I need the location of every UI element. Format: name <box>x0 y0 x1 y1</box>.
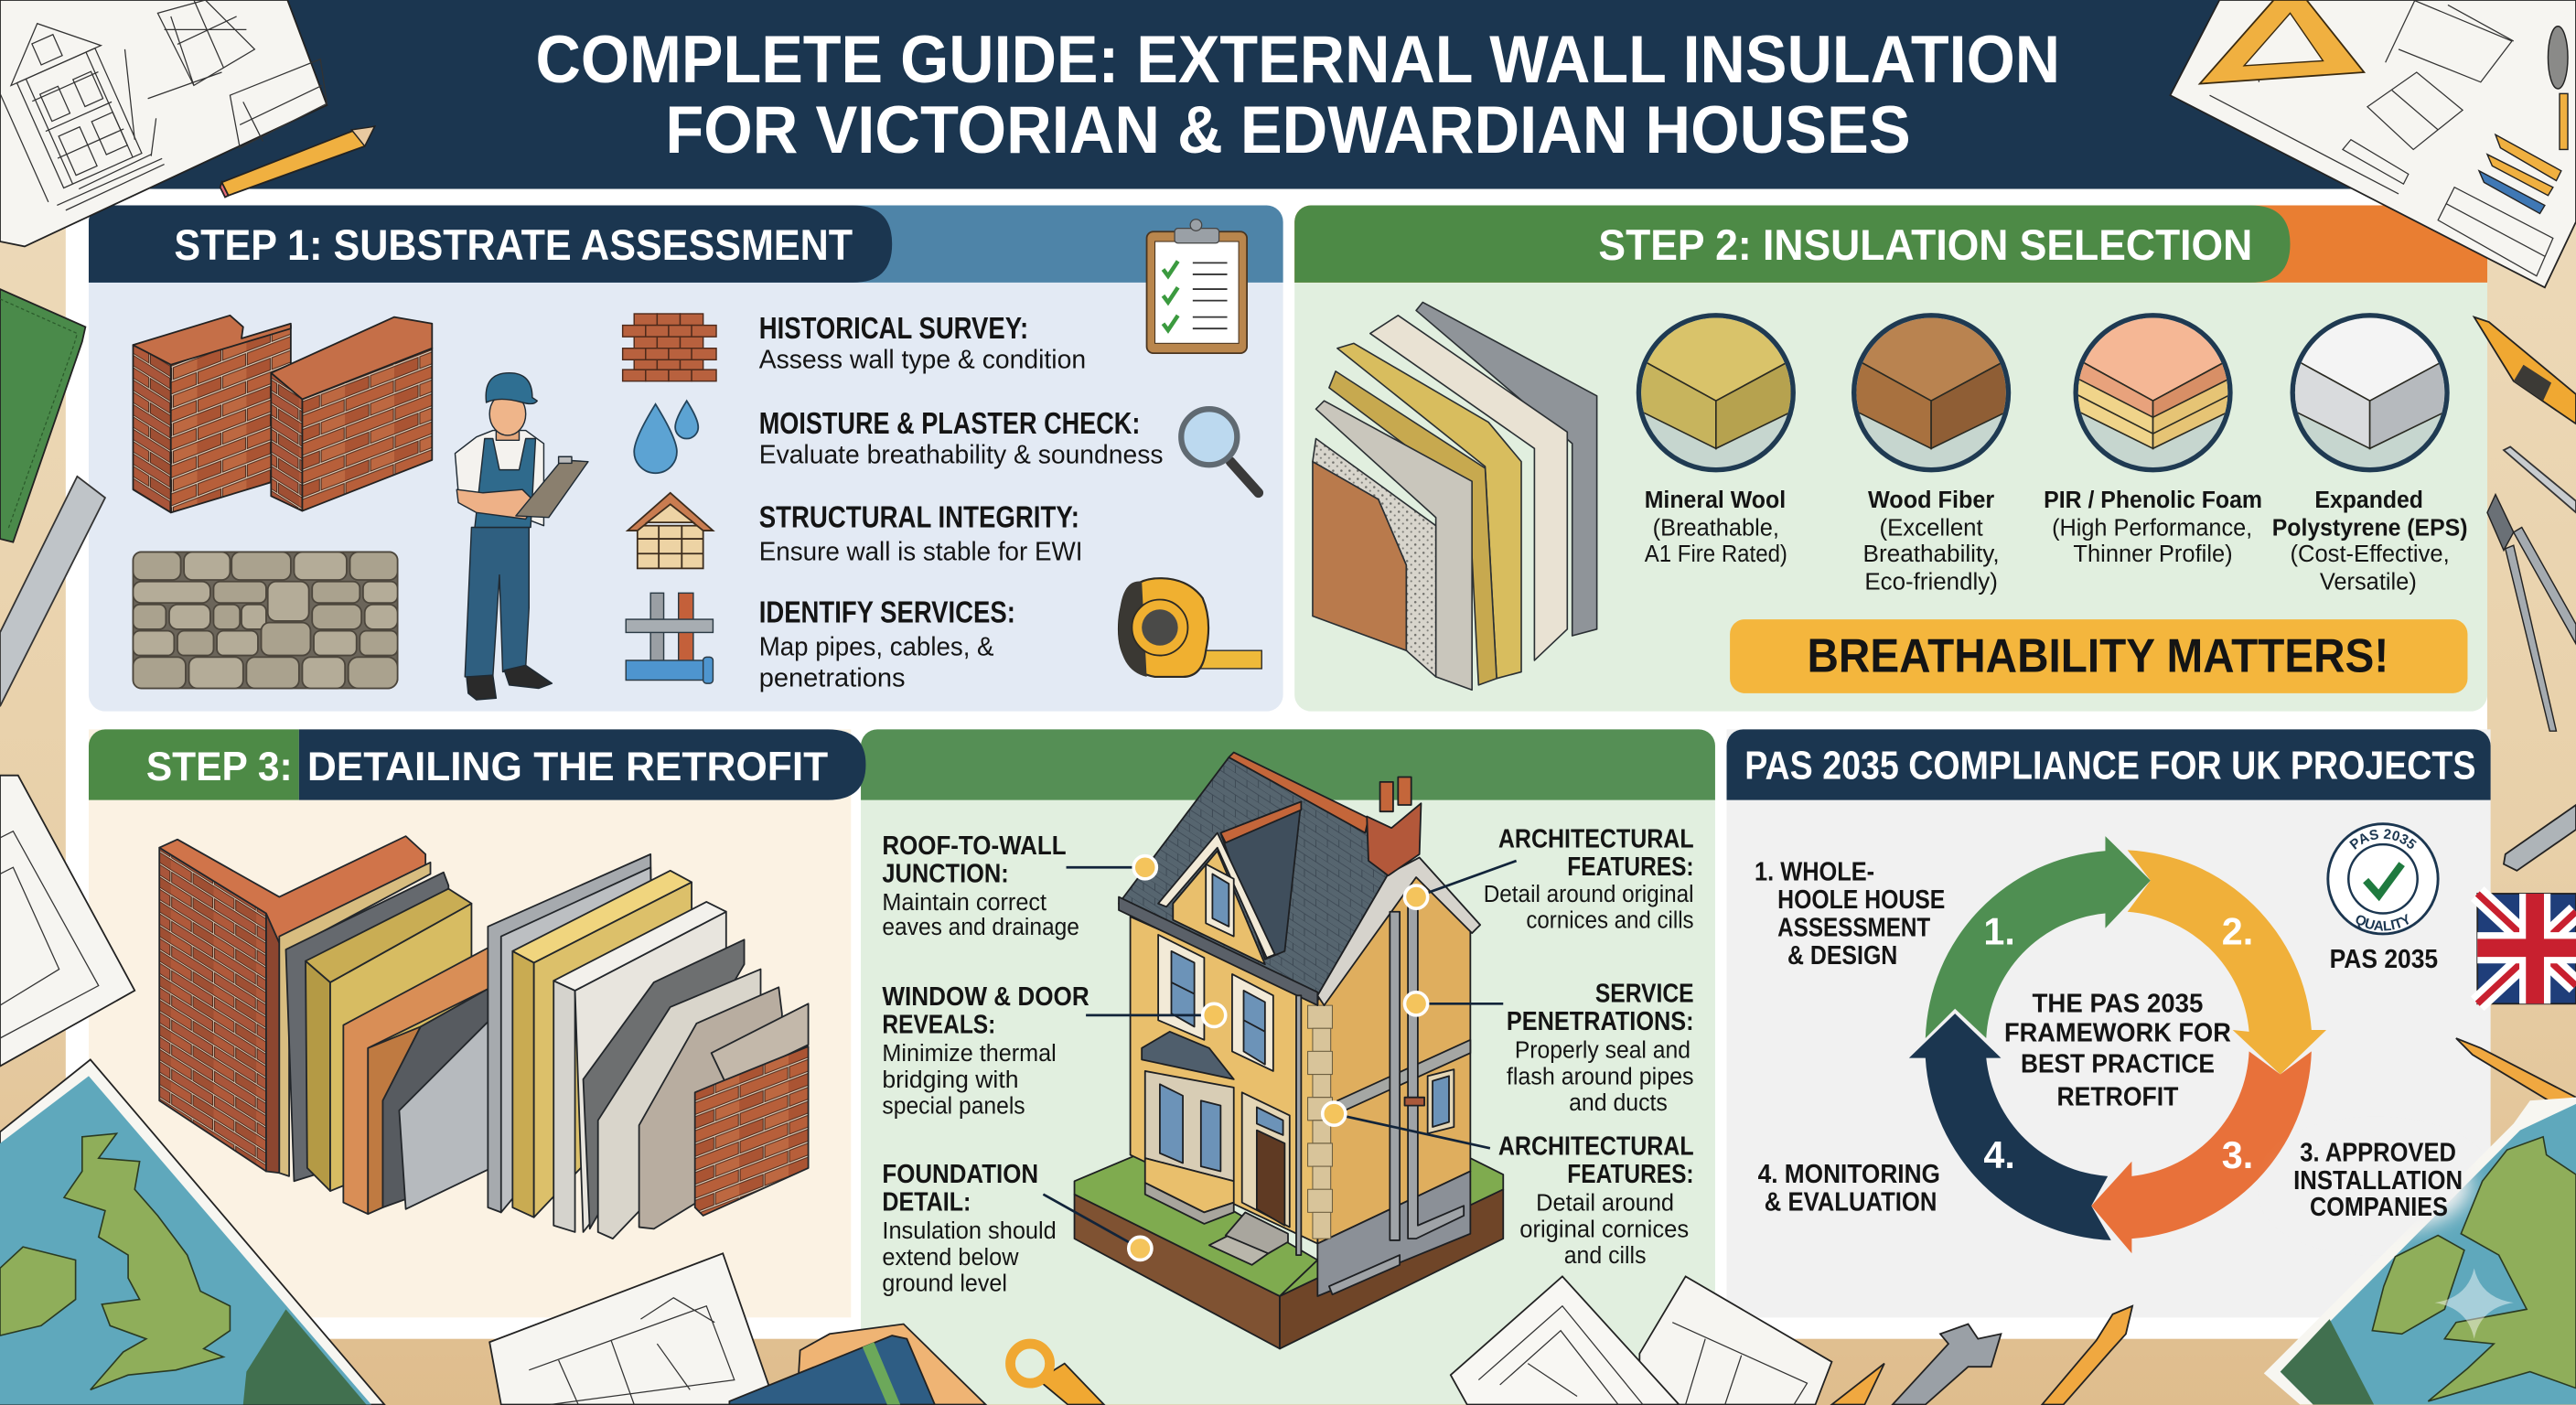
callout: architectural features lower <box>1323 1102 1694 1269</box>
callout: roof-to-wall junction: ROOF-TO-WALL <box>882 831 1067 861</box>
callout: foundation detail: FOUNDATION <box>882 1160 1038 1189</box>
cycle arrow 4: 4. <box>1983 1134 2015 1176</box>
pencils <box>2479 27 2568 213</box>
blueprint sketch: house elevation <box>0 0 162 208</box>
cycle centre text: FRAMEWORK FOR <box>2004 1019 2231 1048</box>
illustration: surveyor with clipboard <box>455 373 588 700</box>
stage label 3 <box>2293 1139 2463 1222</box>
material: expanded polystyrene: Versatile) <box>2320 568 2417 595</box>
title: FOR VICTORIAN & EDWARDIAN HOUSES <box>665 91 1911 167</box>
header band <box>0 0 2576 189</box>
house roof <box>1119 753 1480 1005</box>
material: wood fiber <box>1841 312 2023 595</box>
step 1 heading pill: STEP 1: SUBSTRATE ASSESSMENT <box>174 221 853 270</box>
callout: service penetrations: SERVICE <box>1595 980 1694 1009</box>
material: mineral wool: Mineral Wool <box>1645 486 1786 513</box>
stage label 4 <box>1758 1160 1940 1217</box>
panel: step 2 insulation selection <box>1294 205 2487 712</box>
PIR foam sample cube <box>2078 318 2228 450</box>
icon: pencil top left <box>220 126 374 198</box>
callout: service penetrations <box>1405 980 1694 1116</box>
step 1 header band <box>89 205 1283 283</box>
structural integrity row: Ensure wall is stable for EWI <box>759 537 1083 566</box>
cycle arrow 3 <box>2091 1051 2312 1253</box>
right map GB landmass <box>2428 1137 2576 1401</box>
icon: clipboard checklist <box>1147 220 1247 353</box>
house front windows and door <box>1142 935 1301 1255</box>
pen right <box>2504 805 2576 871</box>
wood fiber sample cube <box>1856 318 2006 450</box>
callout: architectural features lower: ARCHITECTURAL <box>1498 1132 1694 1162</box>
callout: architectural features upper: Detail around original <box>1484 880 1694 907</box>
title: COMPLETE GUIDE: EXTERNAL WALL INSULATION <box>535 21 2060 97</box>
blueprint: lower left <box>0 776 134 1067</box>
EPS sample cube <box>2294 318 2444 450</box>
step 2 heading pill <box>1294 205 2291 283</box>
material: mineral wool: A1 Fire Rated) <box>1645 540 1787 567</box>
material: expanded polystyrene: Expanded <box>2314 486 2423 513</box>
stage label 3: INSTALLATION <box>2293 1166 2463 1196</box>
quality badge: PAS 2035 <box>2349 829 2417 850</box>
material: PIR phenolic foam: (High Performance, <box>2052 513 2252 541</box>
stage label 4: & EVALUATION <box>1765 1188 1937 1217</box>
callout: breathability matters: BREATHABILITY MATTERS! <box>1808 630 2388 683</box>
callout: roof-to-wall junction: Maintain correct <box>882 888 1047 916</box>
material: mineral wool: (Breathable, <box>1653 513 1779 541</box>
illustration: stone wall <box>133 552 398 688</box>
stage label 1: & DESIGN <box>1787 941 1897 971</box>
panel: step 1 substrate assessment <box>89 205 1283 712</box>
material: PIR phenolic foam: PIR / Phenolic Foam <box>2044 486 2262 513</box>
callout: breathability matters <box>1730 619 2467 693</box>
moisture and plaster check row <box>634 401 1164 473</box>
step 2 heading pill: STEP 2: INSULATION SELECTION <box>1598 221 2252 270</box>
step 3 heading <box>89 729 865 800</box>
callout: roof-to-wall junction: JUNCTION: <box>882 859 1009 888</box>
illustration: layered insulation build-up <box>1313 302 1597 690</box>
cycle arrow 1 <box>1926 836 2151 1038</box>
icon: brick stack <box>623 314 716 381</box>
material: wood fiber: Eco-friendly) <box>1864 568 1998 595</box>
moisture and plaster check row: MOISTURE & PLASTER CHECK: <box>759 407 1140 441</box>
chart: PAS 2035 cycle <box>1909 836 2326 1253</box>
PAS 2035 heading: PAS 2035 COMPLIANCE FOR UK PROJECTS <box>1744 744 2475 788</box>
historical survey row <box>623 312 1086 381</box>
icon: wrench ring bottom <box>1010 1344 1104 1405</box>
small ruler right <box>2504 446 2576 512</box>
panel: PAS 2035 compliance <box>1727 729 2491 1317</box>
callout: window and door reveals: Minimize thermal <box>882 1039 1057 1067</box>
callout: foundation detail: DETAIL: <box>882 1188 971 1217</box>
material: mineral wool <box>1626 312 1808 567</box>
icon: union flag <box>2477 894 2576 1003</box>
steel ruler left <box>0 477 105 706</box>
step 1 heading pill <box>89 205 892 283</box>
green notebook left <box>0 289 85 542</box>
material: expanded polystyrene <box>2272 312 2467 595</box>
map: UK lower right <box>2264 1098 2576 1405</box>
pencil right <box>2456 1038 2576 1117</box>
Ireland landmass <box>0 1247 76 1335</box>
callout: window and door reveals <box>882 982 1226 1120</box>
material: wood fiber: (Excellent <box>1880 513 1983 541</box>
callout: window and door reveals: REVEALS: <box>882 1011 995 1040</box>
UK landmass <box>64 1133 230 1389</box>
step 3 heading: DETAILING THE RETROFIT <box>307 743 828 789</box>
watermark star <box>2435 1268 2514 1339</box>
white page sheet <box>66 189 2487 1339</box>
stage label 4: 4. MONITORING <box>1758 1160 1940 1189</box>
moisture and plaster check row: Evaluate breathability & soundness <box>759 440 1164 469</box>
callout: architectural features lower: original cornices <box>1519 1215 1689 1242</box>
PAS 2035 heading <box>1727 729 2491 800</box>
green header band <box>861 729 1715 800</box>
material: expanded polystyrene: Polystyrene (EPS) <box>2272 513 2467 541</box>
icon: water drops <box>634 401 698 473</box>
historical survey row: Assess wall type & condition <box>759 345 1086 374</box>
callout: architectural features upper: ARCHITECTURAL <box>1498 825 1694 854</box>
material: PIR phenolic foam <box>2044 312 2262 567</box>
blueprint: top right with set square, pencils and brush <box>2170 0 2576 287</box>
mineral wool sample cube <box>1641 318 1791 450</box>
callout: foundation detail: ground level <box>882 1270 1007 1297</box>
cycle arrow 2: 2. <box>2222 911 2253 953</box>
identify services row <box>626 593 1015 693</box>
quoin stones <box>1308 1005 1332 1239</box>
tools: bottom pencil, wrench and brush <box>1831 1306 2132 1405</box>
illustration: exploded wall layers <box>159 836 809 1239</box>
blueprint sketch: window and title block <box>66 0 327 210</box>
callout: architectural features upper <box>1405 825 1694 934</box>
identify services row: penetrations <box>759 664 906 693</box>
blueprint: top left <box>0 0 327 246</box>
callout: foundation detail: Insulation should <box>882 1217 1057 1244</box>
material: wood fiber: Breathability, <box>1863 540 2000 567</box>
illustration: victorian terraced house <box>1075 753 1503 1348</box>
house downpipes <box>1329 904 1464 1294</box>
title <box>535 21 2060 167</box>
icon: timber frame house <box>628 493 713 568</box>
identify services row: Map pipes, cables, & <box>759 633 994 662</box>
material: wood fiber: Wood Fiber <box>1868 486 1994 513</box>
callout: window and door reveals: special panels <box>882 1092 1025 1120</box>
blueprints: bottom right <box>1451 1276 1831 1405</box>
stage label 1: HOOLE HOUSE <box>1777 885 1945 915</box>
icon: tape measure <box>1119 578 1261 677</box>
identify services row: IDENTIFY SERVICES: <box>759 596 1015 630</box>
callout: window and door reveals: WINDOW & DOOR <box>882 982 1089 1012</box>
icon: magnifying glass <box>1181 409 1259 493</box>
callout: service penetrations: and ducts <box>1569 1089 1668 1116</box>
cycle arrow 4 <box>1909 1014 2111 1240</box>
structural integrity row <box>628 493 1083 568</box>
map: UK lower left <box>0 1059 384 1405</box>
cycle arrow 1: 1. <box>1983 911 2015 953</box>
stage label 3: 3. APPROVED <box>2300 1139 2456 1168</box>
callout: service penetrations: Properly seal and <box>1515 1036 1690 1064</box>
callout: architectural features upper: cornices and cills <box>1526 906 1694 934</box>
cycle arrow 2 <box>2128 850 2326 1075</box>
blueprint: bottom centre <box>489 1253 776 1405</box>
cycle arrow 3: 3. <box>2222 1134 2253 1176</box>
stage label 3: COMPANIES <box>2310 1193 2448 1222</box>
callout: service penetrations: flash around pipes <box>1507 1062 1694 1089</box>
stage label 1: 1. WHOLE- <box>1755 858 1874 887</box>
utility knife right <box>2474 317 2576 424</box>
cycle centre text: BEST PRACTICE <box>2021 1050 2215 1079</box>
icon: service pipes <box>626 593 713 683</box>
stage label 1: ASSESSMENT <box>1777 914 1931 943</box>
fade behind approved installation label <box>2281 1140 2471 1232</box>
callout: architectural features lower: and cills <box>1564 1241 1647 1269</box>
callout: roof-to-wall junction: eaves and drainage <box>882 913 1079 940</box>
quality badge: QUALITY <box>2356 913 2410 931</box>
quality badge <box>2326 822 2440 974</box>
callout: roof-to-wall junction <box>882 831 1156 940</box>
house chimney <box>1367 777 1421 875</box>
panel: house details <box>861 729 1715 1405</box>
cycle centre text: THE PAS 2035 <box>2033 989 2203 1018</box>
panel: step 3 detailing the retrofit <box>89 729 851 1317</box>
compass right <box>2487 495 2576 731</box>
notebook and envelope bottom <box>729 1325 986 1405</box>
callout: foundation detail <box>882 1160 1152 1297</box>
structural integrity row: STRUCTURAL INTEGRITY: <box>759 500 1079 534</box>
cycle centre text: RETROFIT <box>2056 1083 2179 1112</box>
historical survey row: HISTORICAL SURVEY: <box>759 312 1028 346</box>
quality badge: PAS 2035 <box>2330 945 2438 974</box>
callout: window and door reveals: bridging with <box>882 1066 1018 1093</box>
right map Ireland landmass <box>2372 1236 2464 1334</box>
cycle centre text <box>2004 989 2231 1112</box>
illustration: double brick wall <box>133 316 432 512</box>
callout: architectural features lower: FEATURES: <box>1567 1160 1694 1189</box>
house walls <box>1131 867 1470 1296</box>
step 2 header band <box>1294 205 2487 283</box>
callout: architectural features upper: FEATURES: <box>1567 853 1694 882</box>
callout: service penetrations: PENETRATIONS: <box>1507 1007 1694 1036</box>
step 3 heading: STEP 3: <box>146 743 293 789</box>
material: PIR phenolic foam: Thinner Profile) <box>2073 540 2233 567</box>
callout: architectural features lower: Detail around <box>1536 1189 1674 1217</box>
house ground block <box>1075 1155 1503 1348</box>
callout: foundation detail: extend below <box>882 1243 1019 1271</box>
material: expanded polystyrene: (Cost-Effective, <box>2291 540 2450 567</box>
stage label 1 <box>1755 858 1945 971</box>
set square <box>2200 0 2364 84</box>
house dormer <box>1158 801 1301 964</box>
